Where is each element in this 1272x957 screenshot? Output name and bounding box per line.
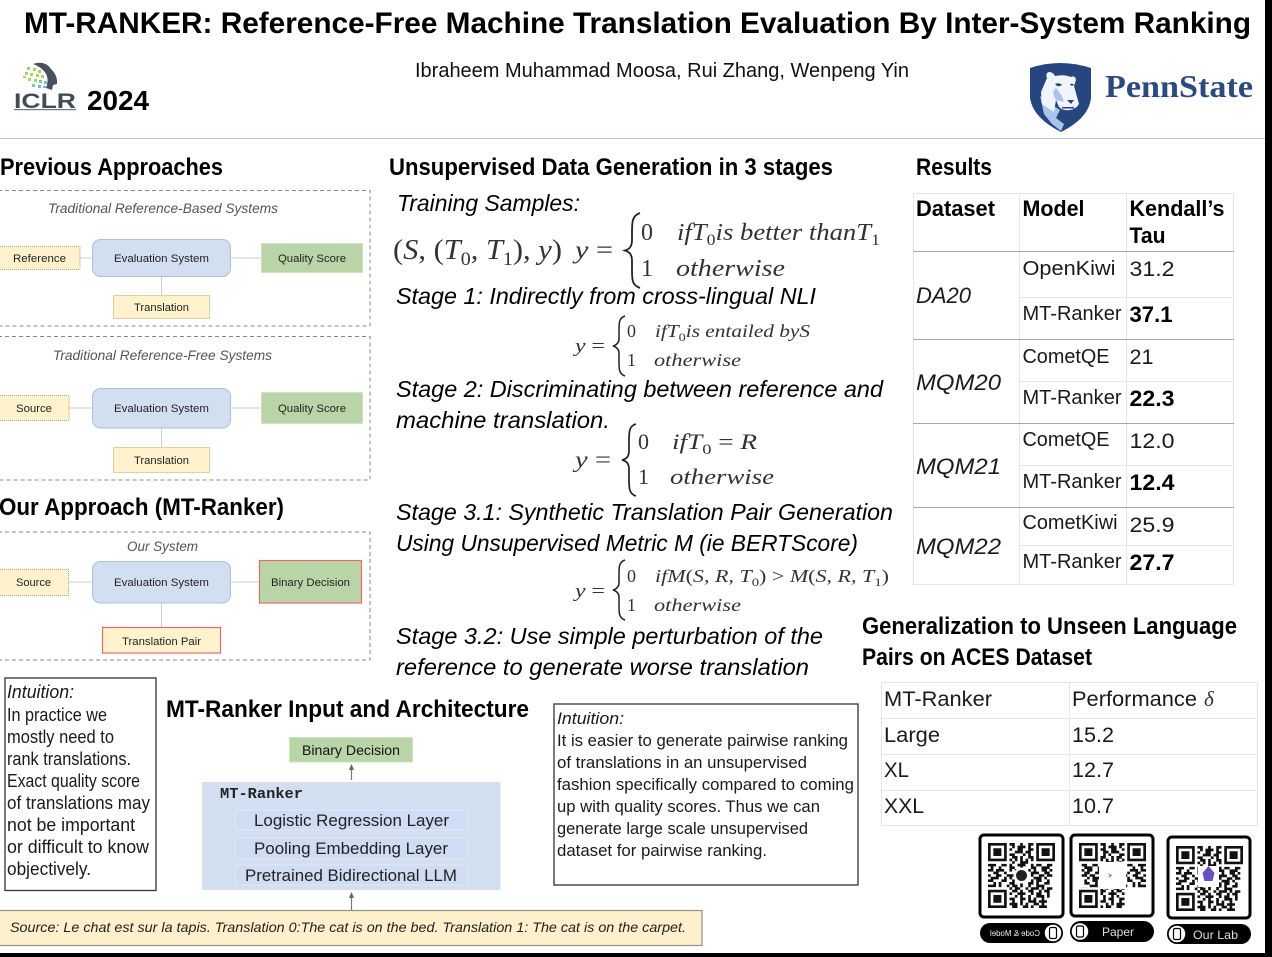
heading: architecture: MT-Ranker Input and Architecture [166, 696, 529, 723]
equation: stage 2: 1 [638, 464, 649, 489]
callout: intuition left: mostly need to [7, 727, 114, 747]
table: results: 37.1 [1130, 302, 1172, 327]
callout: intuition left: Exact quality score [7, 771, 140, 791]
heading: generalization: Pairs on ACES Dataset [862, 644, 1092, 671]
equation: training sample definition: , [471, 234, 486, 266]
equation: stage 2: R [740, 429, 754, 454]
callout: intuition left [5, 678, 156, 890]
table: results: CometQE [1022, 428, 1110, 451]
callout: intuition left: of translations may [7, 793, 150, 813]
table: ACES performance: Performance [1072, 687, 1197, 711]
equation: stage 2: y = [573, 447, 611, 472]
equation: stage 3.1: otherwise [654, 595, 741, 615]
equation: stage 3.1: ) > [759, 566, 790, 587]
chart: architecture diagram [202, 738, 500, 910]
panel: reference-based systems: Translation [134, 302, 189, 314]
table: ACES performance [882, 682, 1258, 826]
icon: QR code, our lab [1167, 837, 1251, 944]
panel: reference-based systems: Quality Score [278, 253, 346, 265]
panel: our system: Translation Pair [122, 636, 201, 648]
text: training samples: Training Samples: [397, 190, 580, 216]
table: results: Tau [1130, 223, 1166, 248]
equation: training sample definition: y = [571, 237, 613, 264]
equation: stage 3.1: 0 [752, 575, 759, 589]
callout: intuition left: In practice we [7, 705, 107, 725]
icon: QR code, our lab: Our Lab [1193, 928, 1238, 942]
panel: reference-free systems: Evaluation System [114, 403, 209, 415]
heading: unsupervised data generation: Unsupervised Data Generation in 3 stages [389, 154, 833, 181]
equation: training sample definition: otherwise [676, 256, 785, 282]
table: results [913, 194, 1234, 584]
text: stage 3.2 continued: reference to generate worse translation [396, 654, 809, 680]
text: stage 3.2: Stage 3.2: Use simple perturbation of the [396, 623, 823, 649]
text: stage 3.1: Stage 3.1: Synthetic Translation Pair Generation [396, 499, 893, 525]
authors: Ibraheem Muhammad Moosa, Rui Zhang, Wenpeng Yin [415, 60, 909, 82]
table: results: CometQE [1022, 345, 1110, 368]
equation: training sample definition: ), [513, 234, 538, 266]
callout: intuition right: generate large scale unsupervised [557, 820, 808, 838]
table: ACES performance: 15.2 [1072, 723, 1114, 747]
equation: stage 1 [572, 316, 810, 376]
equation: stage 2: = [711, 429, 740, 454]
callout: intuition left: Intuition: [7, 682, 74, 702]
equation: training sample definition: ifT [677, 220, 704, 246]
heading: previous approaches: Previous Approaches [0, 154, 223, 181]
text: stage 1: Stage 1: Indirectly from cross-lingual NLI [396, 283, 816, 309]
icon: ICLR 2024 logo [14, 63, 149, 116]
equation: stage 3.1: 0 [627, 566, 636, 586]
chart: architecture diagram: MT-Ranker [220, 786, 303, 803]
equation: stage 3.1: ) [882, 566, 889, 587]
icon: Penn State logo [1030, 63, 1253, 132]
callout: intuition left: rank translations. [7, 749, 131, 769]
callout: intuition right: up with quality scores. Thus we can [557, 798, 820, 816]
equation: training sample definition: T [486, 234, 505, 266]
icon: QR code, paper: Paper [1102, 925, 1134, 939]
table: results: Dataset [916, 196, 996, 221]
text: stage 2 continued: machine translation. [396, 407, 610, 433]
table: results: OpenKiwi [1022, 257, 1116, 280]
icon: QR code, code and model [980, 835, 1063, 943]
equation: stage 1: is entailed byS [686, 321, 810, 341]
callout: input example: Source: Le chat est sur la tapis. Translation 0:The cat is on the bed. Translation 1: The cat is on the carpet. [10, 919, 686, 935]
table: results: 12.4 [1130, 470, 1175, 495]
text: stage 2: Stage 2: Discriminating between reference and [396, 376, 884, 402]
table: results: 21 [1130, 345, 1154, 369]
panel: our system: Binary Decision [271, 577, 350, 589]
equation: stage 2: otherwise [670, 464, 774, 489]
callout: intuition right: of translations in an unsupervised [557, 754, 807, 772]
heading: our approach: Our Approach (MT-Ranker) [0, 494, 284, 521]
equation: stage 2 [573, 424, 774, 496]
text: stage 3.1 continued: Using Unsupervised Metric M (ie BERTScore) [396, 530, 858, 556]
table: results: 31.2 [1130, 257, 1174, 281]
table: ACES performance: δ [1204, 687, 1215, 711]
panel: reference-free systems: Source [16, 403, 52, 415]
chart: architecture diagram: Logistic Regression Layer [254, 811, 449, 830]
callout: input example [0, 910, 702, 946]
title: MT-RANKER: Reference-Free Machine Translation Evaluation By Inter-System Ranking [24, 7, 1251, 40]
chart: architecture diagram: Pooling Embedding Layer [254, 839, 448, 858]
table: results: MT-Ranker [1022, 386, 1122, 409]
equation: stage 3.1: 1 [627, 595, 636, 615]
table: ACES performance: XL [884, 758, 909, 782]
table: ACES performance: MT-Ranker [884, 687, 992, 711]
icon: QR code, paper [1070, 835, 1154, 942]
table: results: MQM20 [916, 370, 1002, 395]
equation: training sample definition: 0 [707, 232, 716, 249]
table: ACES performance: 12.7 [1072, 758, 1114, 782]
equation: training sample definition: is better thanT [716, 220, 873, 246]
icon: ICLR 2024 logo: ICLR [14, 90, 76, 113]
panel: our system: Evaluation System [114, 577, 209, 589]
heading: generalization: Generalization to Unseen Language [862, 613, 1237, 640]
table: results: 12.0 [1130, 429, 1175, 453]
icon: ICLR 2024 logo: 2024 [87, 85, 149, 116]
equation: stage 3.1: 1 [874, 575, 882, 589]
equation: training sample definition: 1 [871, 232, 880, 249]
heading: results: Results [916, 154, 992, 181]
equation: stage 1: y = [572, 336, 605, 357]
equation: stage 1: ifT [655, 321, 675, 341]
table: results: 27.7 [1130, 550, 1174, 575]
panel: reference-free systems: Traditional Reference-Free Systems [53, 347, 272, 363]
table: results: 25.9 [1130, 513, 1174, 537]
callout: intuition right: fashion specifically compared to coming [557, 776, 854, 794]
callout: intuition left: or difficult to know [7, 837, 150, 857]
panel: reference-based systems: Traditional Reference-Based Systems [48, 200, 278, 216]
icon: Penn State logo: PennState [1105, 68, 1253, 104]
equation: stage 2: 0 [702, 442, 711, 458]
callout: intuition right: dataset for pairwise ranking. [557, 842, 767, 860]
icon: QR code, code and model: Code & Model [990, 929, 1040, 938]
table: ACES performance: XXL [884, 794, 924, 818]
equation: training sample definition: 1 [641, 256, 653, 282]
equation: stage 1: 0 [679, 330, 686, 344]
heading: generalization [862, 613, 1237, 671]
callout: intuition right: Intuition: [557, 710, 624, 728]
equation: stage 1: 1 [627, 350, 636, 370]
chart: architecture diagram: Binary Decision [302, 742, 400, 758]
panel: reference-based systems: Reference [13, 253, 66, 265]
table: results: MQM21 [916, 454, 1001, 479]
table: results: CometKiwi [1022, 511, 1118, 534]
callout: intuition right: It is easier to generate pairwise ranking [557, 732, 848, 750]
chart: architecture diagram: Pretrained Bidirectional LLM [245, 866, 457, 885]
equation: stage 3.1: M(S, R, T [790, 566, 864, 586]
table: results: MQM22 [916, 534, 1001, 559]
panel: reference-based systems [0, 190, 370, 326]
equation: training sample definition: 0 [641, 220, 653, 246]
panel: reference-free systems: Translation [134, 455, 189, 467]
equation: training sample definition: (S, (T [393, 234, 460, 266]
header divider [0, 138, 1265, 139]
table: results: DA20 [916, 283, 972, 308]
equation: stage 3.1 [572, 560, 889, 620]
callout: intuition right [554, 704, 858, 885]
equation: stage 1: 0 [627, 321, 636, 341]
table: results: Kendall’s [1130, 196, 1224, 221]
equation: stage 1: otherwise [654, 350, 741, 370]
equation: stage 2: 0 [638, 429, 649, 454]
equation: training sample definition: y) [538, 234, 562, 266]
callout: intuition left: not be important [7, 815, 135, 835]
table: results: MT-Ranker [1022, 302, 1122, 325]
panel: reference-free systems [0, 336, 370, 480]
panel: our system: Our System [127, 538, 198, 554]
table: results: 22.3 [1130, 386, 1174, 411]
equation: training sample definition: 1 [503, 249, 513, 270]
panel: reference-free systems: Quality Score [278, 403, 346, 415]
equation: training sample definition: 0 [461, 249, 471, 270]
equation: stage 3.1: y = [572, 581, 605, 602]
table: results: Model [1022, 196, 1084, 221]
equation: stage 3.1: ifM (S, R, T [655, 566, 741, 586]
panel: reference-based systems: Evaluation System [114, 253, 209, 265]
table: ACES performance: 10.7 [1072, 794, 1114, 818]
table: ACES performance: Large [884, 723, 940, 747]
table: results: MT-Ranker [1022, 550, 1122, 573]
equation: stage 2: ifT [672, 429, 696, 454]
equation: training sample definition [393, 213, 880, 288]
panel: our system [0, 532, 370, 660]
table: results: MT-Ranker [1022, 470, 1122, 493]
callout: intuition left: objectively. [7, 859, 91, 879]
panel: our system: Source [16, 577, 51, 589]
